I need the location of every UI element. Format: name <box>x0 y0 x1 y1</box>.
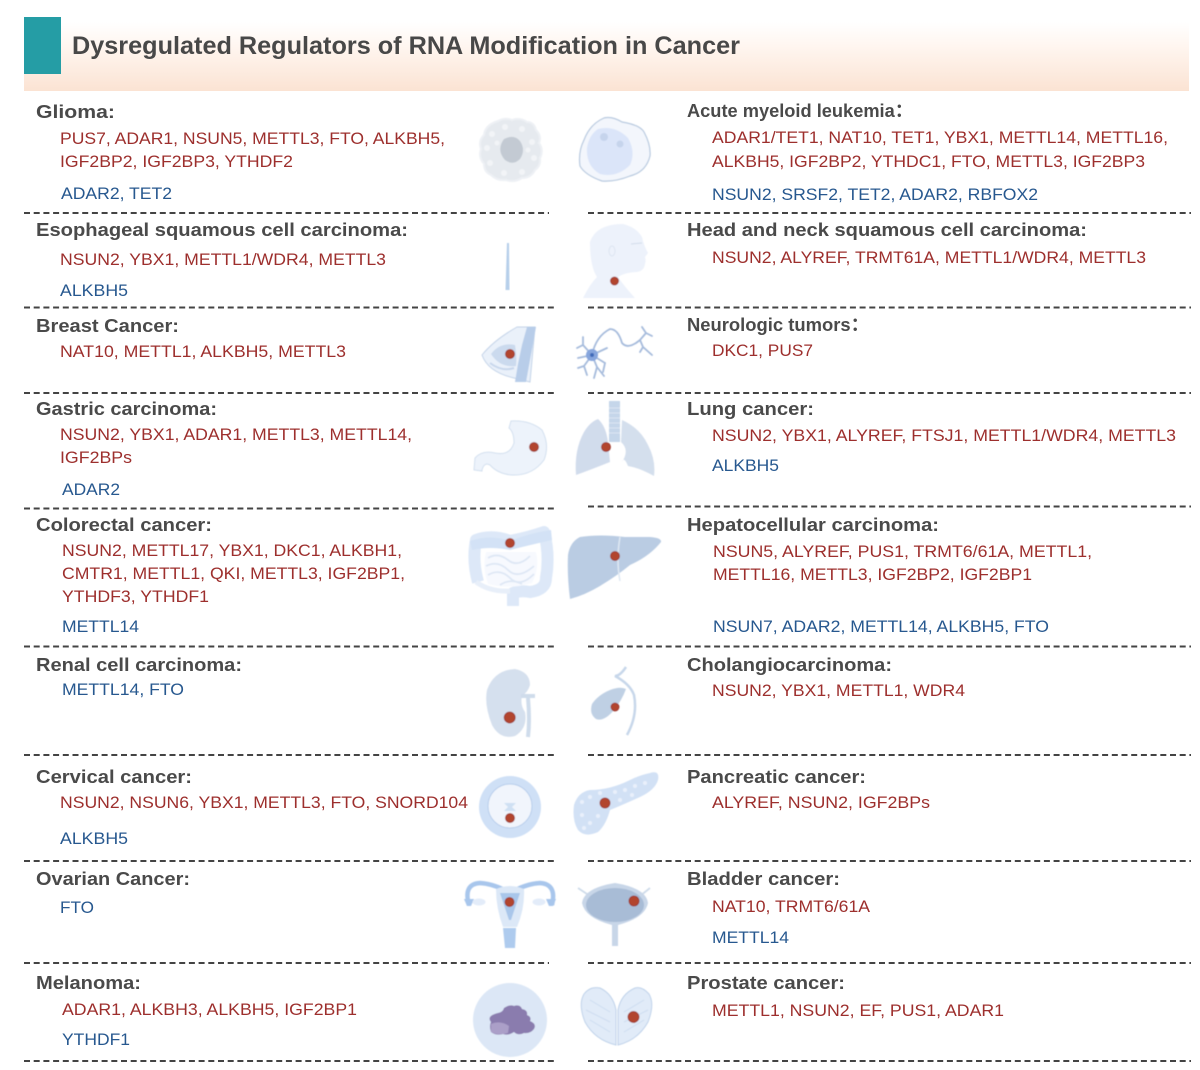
heading: melanoma: Melanoma: <box>36 972 141 993</box>
icon: neuron <box>577 327 652 378</box>
upregulated genes: melanoma: ADAR1, ALKBH3, ALKBH5, IGF2BP1 <box>62 1000 357 1019</box>
panel: bladder <box>687 868 871 947</box>
downregulated genes: glioma: ADAR2, TET2 <box>61 184 172 203</box>
downregulated genes: melanoma: YTHDF1 <box>62 1030 130 1049</box>
icon: leukemia cell <box>580 118 650 181</box>
icon: ovary and uterus <box>464 883 556 948</box>
tumor marker <box>628 1012 639 1022</box>
upregulated genes: bladder: NAT10, TRMT6/61A <box>712 897 871 916</box>
tumor marker <box>629 896 639 906</box>
icon: colon <box>470 530 552 606</box>
icon: bladder <box>578 883 650 946</box>
upregulated genes: colorectal: YTHDF3, YTHDF1 <box>62 587 209 606</box>
upregulated genes: glioma <box>60 129 445 171</box>
upregulated genes: AML <box>712 128 1168 171</box>
heading: breast: Breast Cancer: <box>36 315 179 336</box>
panel: lung <box>687 398 1176 475</box>
heading: cholangiocarcinoma: Cholangiocarcinoma: <box>687 654 892 675</box>
upregulated genes: glioma: PUS7, ADAR1, NSUN5, METTL3, FTO, ALKBH5, <box>60 129 445 148</box>
upregulated genes: AML: ADAR1/TET1, NAT10, TET1, YBX1, METTL14, METTL16, <box>712 128 1168 147</box>
downregulated genes: cervical: ALKBH5 <box>60 829 128 848</box>
tumor marker <box>602 442 610 452</box>
tumor marker <box>506 538 514 548</box>
panel: head and neck <box>687 219 1146 267</box>
panel: cervical <box>36 766 468 848</box>
tumor marker <box>530 442 538 452</box>
icon: cervix <box>479 776 541 838</box>
upregulated genes: breast: NAT10, METTL1, ALKBH5, METTL3 <box>60 342 346 361</box>
downregulated genes: colorectal: METTL14 <box>62 617 139 636</box>
heading: bladder: Bladder cancer: <box>687 868 840 889</box>
tumor marker <box>610 552 620 560</box>
tumor marker <box>610 277 618 285</box>
icon: kidney <box>486 669 535 737</box>
heading: gastric: Gastric carcinoma: <box>36 398 217 419</box>
upregulated genes: esophageal: NSUN2, YBX1, METTL1/WDR4, METTL3 <box>60 250 386 269</box>
heading: pancreatic: Pancreatic cancer: <box>687 766 866 787</box>
panel: colorectal <box>36 514 405 636</box>
upregulated genes: pancreatic: ALYREF, NSUN2, IGF2BPs <box>712 793 930 812</box>
downregulated genes: renal: METTL14, FTO <box>62 680 184 699</box>
upregulated genes: glioma: IGF2BP2, IGF2BP3, YTHDF2 <box>60 152 293 171</box>
icon: glioma cell <box>480 119 542 181</box>
upregulated genes: lung: NSUN2, YBX1, ALYREF, FTSJ1, METTL1/WDR4, METTL3 <box>712 426 1176 445</box>
downregulated genes: AML: NSUN2, SRSF2, TET2, ADAR2, RBFOX2 <box>712 185 1038 204</box>
upregulated genes: cervical: NSUN2, NSUN6, YBX1, METTL3, FTO, SNORD104 <box>60 793 468 812</box>
icon: pancreas <box>574 772 658 835</box>
icon: gallbladder <box>591 667 635 735</box>
panel: cholangiocarcinoma <box>687 654 965 700</box>
downregulated genes: gastric: ADAR2 <box>62 480 120 499</box>
icon: breast <box>482 327 536 382</box>
panel: glioma <box>36 101 445 203</box>
heading: neurologic: Neurologic tumors： <box>687 314 869 335</box>
panel: pancreatic <box>687 766 930 812</box>
icon: prostate <box>581 988 652 1045</box>
icon: stomach <box>474 421 547 475</box>
heading: lung: Lung cancer: <box>687 398 814 419</box>
heading: hepatocellular: Hepatocellular carcinoma: <box>687 514 939 535</box>
tumor marker <box>506 814 514 822</box>
heading: cervical: Cervical cancer: <box>36 766 192 787</box>
tumor marker <box>611 703 619 711</box>
upregulated genes: colorectal <box>62 541 405 606</box>
teal title marker <box>24 17 61 74</box>
panel: neurologic tumors <box>687 314 869 360</box>
upregulated genes: gastric <box>60 425 412 467</box>
heading: prostate: Prostate cancer: <box>687 972 845 993</box>
upregulated genes: prostate: METTL1, NSUN2, EF, PUS1, ADAR1 <box>712 1001 1004 1020</box>
panel: prostate <box>687 972 1004 1020</box>
upregulated genes: colorectal: NSUN2, METTL17, YBX1, DKC1, ALKBH1, <box>62 541 402 560</box>
icon: head and neck <box>583 224 648 298</box>
heading: AML: Acute myeloid leukemia： <box>687 100 913 121</box>
heading: glioma: Glioma: <box>36 101 115 122</box>
tumor marker <box>504 712 515 723</box>
panel: breast <box>36 315 346 361</box>
tumor marker <box>506 350 514 358</box>
upregulated genes: gastric: NSUN2, YBX1, ADAR1, METTL3, METTL14, <box>60 425 412 444</box>
icon: lungs <box>576 401 654 476</box>
downregulated genes: hepatocellular: NSUN7, ADAR2, METTL14, ALKBH5, FTO <box>713 617 1049 636</box>
tumor marker <box>505 898 514 906</box>
tumor marker <box>600 798 610 808</box>
heading: ovarian: Ovarian Cancer: <box>36 868 190 889</box>
upregulated genes: cholangiocarcinoma: NSUN2, YBX1, METTL1, WDR4 <box>712 681 965 700</box>
upregulated genes: head and neck: NSUN2, ALYREF, TRMT61A, METTL1/WDR4, METTL3 <box>712 248 1146 267</box>
panel: melanoma <box>36 972 357 1049</box>
title: Dysregulated Regulators of RNA Modification in Cancer <box>72 32 740 60</box>
panel: acute myeloid leukemia <box>687 100 1168 204</box>
icon: melanoma <box>473 983 547 1057</box>
upregulated genes: neurologic: DKC1, PUS7 <box>712 341 813 360</box>
upregulated genes: AML: ALKBH5, IGF2BP2, YTHDC1, FTO, METTL3, IGF2BP3 <box>712 152 1145 171</box>
panel: gastric <box>36 398 412 499</box>
panel: renal <box>36 654 242 699</box>
downregulated genes: bladder: METTL14 <box>712 928 789 947</box>
downregulated genes: ovarian: FTO <box>60 898 94 917</box>
icon: esophagus <box>506 243 510 290</box>
heading: head and neck: Head and neck squamous cell carcinoma: <box>687 219 1087 240</box>
heading: esophageal: Esophageal squamous cell carcinoma: <box>36 219 408 240</box>
upregulated genes: hepatocellular <box>713 542 1092 584</box>
upregulated genes: gastric: IGF2BPs <box>60 448 132 467</box>
upregulated genes: hepatocellular: METTL16, METTL3, IGF2BP2, IGF2BP1 <box>713 565 1032 584</box>
heading: renal: Renal cell carcinoma: <box>36 654 242 675</box>
panel: hepatocellular <box>687 514 1092 636</box>
upregulated genes: hepatocellular: NSUN5, ALYREF, PUS1, TRMT6/61A, METTL1, <box>713 542 1092 561</box>
heading: colorectal: Colorectal cancer: <box>36 514 212 535</box>
downregulated genes: esophageal: ALKBH5 <box>60 281 128 300</box>
panel: ovarian <box>36 868 190 917</box>
downregulated genes: lung: ALKBH5 <box>712 456 779 475</box>
icon: liver <box>568 536 661 599</box>
upregulated genes: colorectal: CMTR1, METTL1, QKI, METTL3, IGF2BP1, <box>62 564 405 583</box>
panel: esophageal <box>36 219 408 300</box>
header band <box>24 17 1189 91</box>
